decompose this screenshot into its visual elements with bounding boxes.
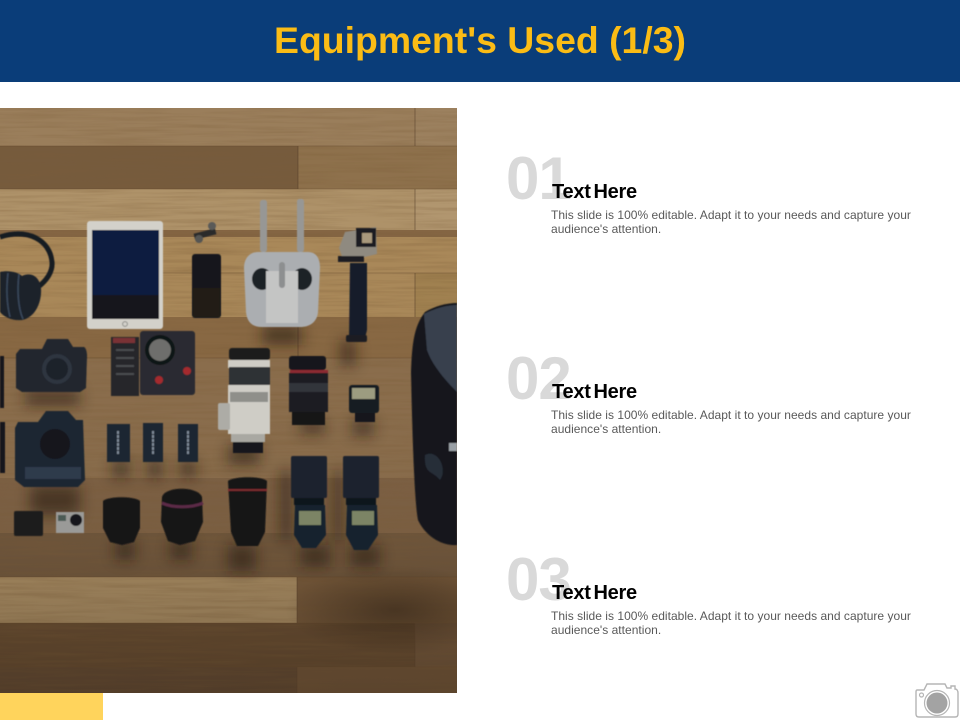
heading 03: Text Here	[552, 582, 637, 604]
action camera on grip	[338, 227, 377, 342]
drone remote controller	[244, 199, 320, 327]
description 01: This slide is 100% editable. Adapt it to your needs and capture your audience's attention.	[551, 208, 911, 236]
lens row	[103, 477, 267, 546]
small accessory	[194, 222, 216, 243]
battery pack	[14, 511, 43, 536]
wooden floor	[0, 108, 505, 693]
action camera	[56, 512, 84, 533]
number 02: 02	[506, 345, 571, 412]
black zoom lens	[289, 356, 328, 425]
header band	[0, 0, 960, 82]
description 03: This slide is 100% editable. Adapt it to your needs and capture your audience's attention.	[551, 609, 911, 637]
headphones	[0, 234, 52, 320]
yellow corner block	[0, 693, 103, 720]
item 02	[506, 345, 911, 436]
description 02: This slide is 100% editable. Adapt it to your needs and capture your audience's attention.	[551, 408, 911, 436]
number 01: 01	[506, 145, 571, 212]
white telephoto lens	[218, 348, 270, 453]
icon: camera	[915, 683, 959, 718]
number 03: 03	[506, 546, 571, 613]
three batteries	[107, 423, 198, 462]
title: Equipment's Used (1/3)	[274, 19, 686, 61]
heading 01: Text Here	[552, 181, 637, 203]
item 01	[506, 145, 911, 236]
left-edge items	[0, 356, 5, 473]
heading 02: Text Here	[552, 381, 637, 403]
small speedlite trigger	[349, 385, 379, 422]
equipment shadows	[25, 325, 380, 571]
backpack	[411, 303, 457, 545]
item 03	[506, 546, 911, 637]
photo: camera equipment on wooden floor	[0, 108, 457, 693]
DSLR camera 1	[16, 339, 87, 392]
DSLR camera 2 with grip	[15, 411, 85, 487]
two flash units	[291, 456, 379, 550]
cinema camera	[111, 331, 195, 396]
smartphone	[192, 254, 221, 318]
tablet	[87, 221, 163, 329]
